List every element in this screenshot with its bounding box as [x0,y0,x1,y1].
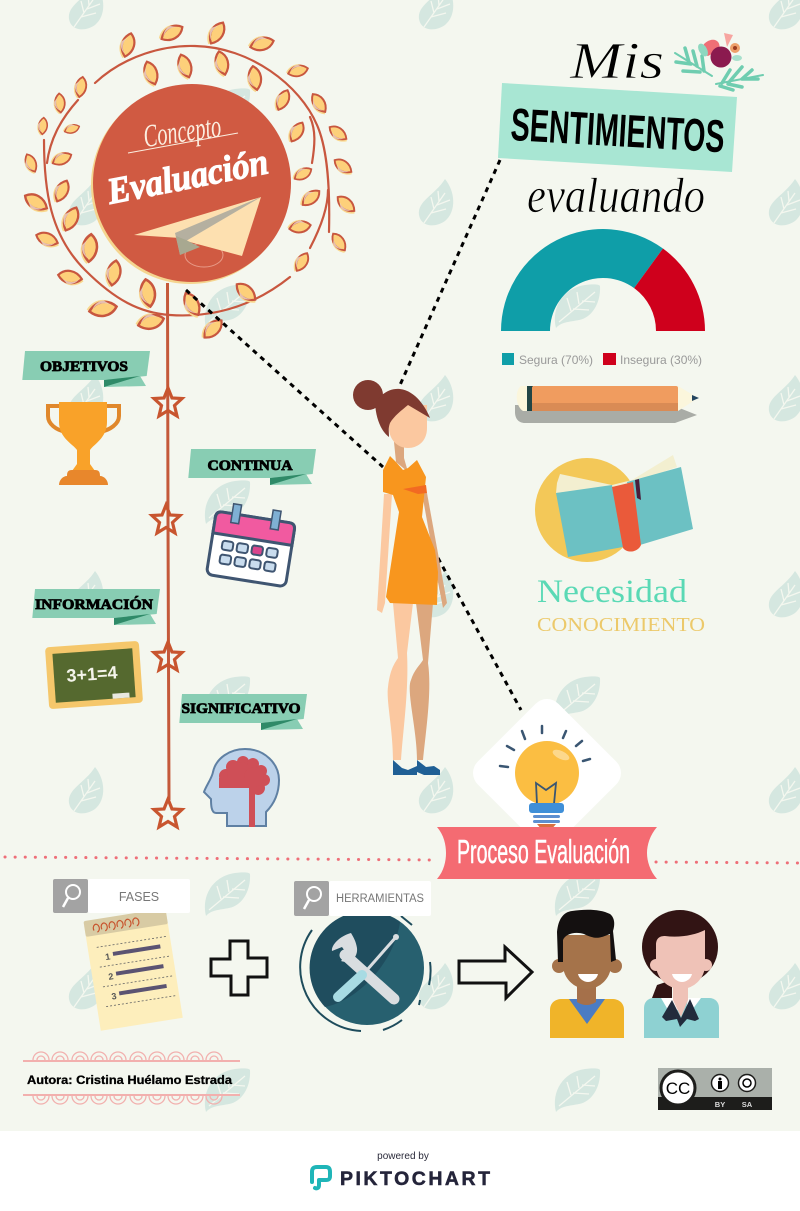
label: continua: CONTINUA [208,458,293,474]
icon: notepad: 3 [111,991,117,1002]
timeline vertical line [168,283,169,800]
footer: powered by: powered by [377,1151,429,1162]
icon: head with brain [204,749,279,827]
text: Necesidad: Necesidad [537,574,688,610]
title: evaluando: evaluando [527,167,705,223]
icon: chalkboard [45,641,143,709]
label: continua [188,449,316,485]
ribbon: Proceso Evaluación [437,827,657,879]
label: significativo: SIGNIFICATIVO [182,701,300,717]
icon: trophy [48,402,119,485]
label: significativo [179,694,307,730]
footer band [0,1131,800,1211]
icon: paper plane [134,197,261,267]
ornament: top scallops [33,1052,222,1104]
icon: open book [535,455,693,562]
icon: arrow [459,947,532,998]
icon: flowers [675,33,763,90]
heading: Concepto: Concepto [141,107,223,154]
dashed connector lines [186,160,521,710]
label: objetivos: OBJETIVOS [40,359,128,375]
avatar: man [550,910,624,1038]
cc license badge [658,1068,772,1110]
wreath branches [44,46,329,315]
search box: herramientas: HERRAMIENTAS [336,893,424,905]
icon: lightbulb [466,692,628,854]
cc license badge: CC [666,1079,690,1098]
ribbon: Proceso Evaluación: Proceso Evaluación [457,833,630,870]
title: Mis: Mis [569,33,664,90]
footer logo [312,1167,490,1190]
banner: sentimientos [498,83,737,172]
dotted divider [5,857,800,863]
author block [23,1052,240,1104]
chart: semicircle gauge [501,229,705,331]
logo icon [312,1167,330,1188]
chart legend: Segura (70%) [519,353,593,367]
icon: pencil [515,386,699,423]
icon: notepad: 1 [105,951,111,962]
icon: calendar [206,501,297,587]
circle [91,86,289,284]
label: objetivos [22,351,150,387]
search box: fases [53,879,190,913]
timeline stars [152,388,182,827]
logo wordmark: PIKTOCHART [340,1168,490,1190]
text: Conocimiento: CONOCIMIENTO [537,614,705,636]
figure: woman [353,380,447,775]
chart legend: Insegura (30%) [620,353,702,367]
author name: Autora: Cristina Huélamo Estrada [27,1075,233,1087]
icon: chalkboard: 3+1=4 [66,662,118,686]
cc license badge: SA [742,1100,753,1109]
search box: herramientas [294,881,431,916]
chart legend [502,353,702,367]
label: informacion [32,589,160,625]
icon: plus [211,941,267,995]
wreath leaves [21,19,359,343]
icon: notepad [83,908,183,1031]
heading: Evaluación: Evaluación [103,141,272,213]
icon: notepad: 2 [108,971,114,982]
avatar: woman [642,910,719,1038]
panel: concept circle [91,84,291,284]
cc license badge: BY [715,1100,725,1109]
label: informacion: INFORMACIÓN [35,596,154,613]
icon: tools [300,911,431,1031]
search box: fases: FASES [119,890,159,904]
